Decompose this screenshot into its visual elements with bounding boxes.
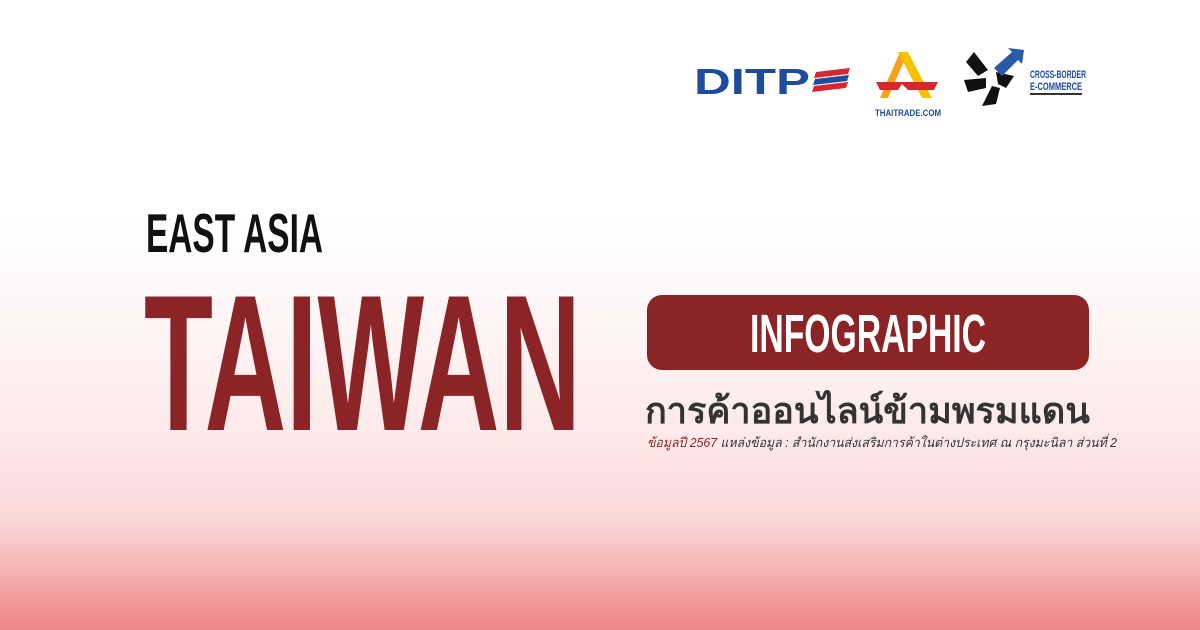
logo: DITP — [694, 64, 850, 98]
logo: cross-border e-commerce — [964, 48, 1086, 106]
pill: Infographic — [647, 295, 1089, 370]
subtitle: Thai: การค้าออนไลน์ข้ามพรมแดน — [645, 390, 1090, 431]
logo: Thaitrade — [875, 52, 941, 118]
